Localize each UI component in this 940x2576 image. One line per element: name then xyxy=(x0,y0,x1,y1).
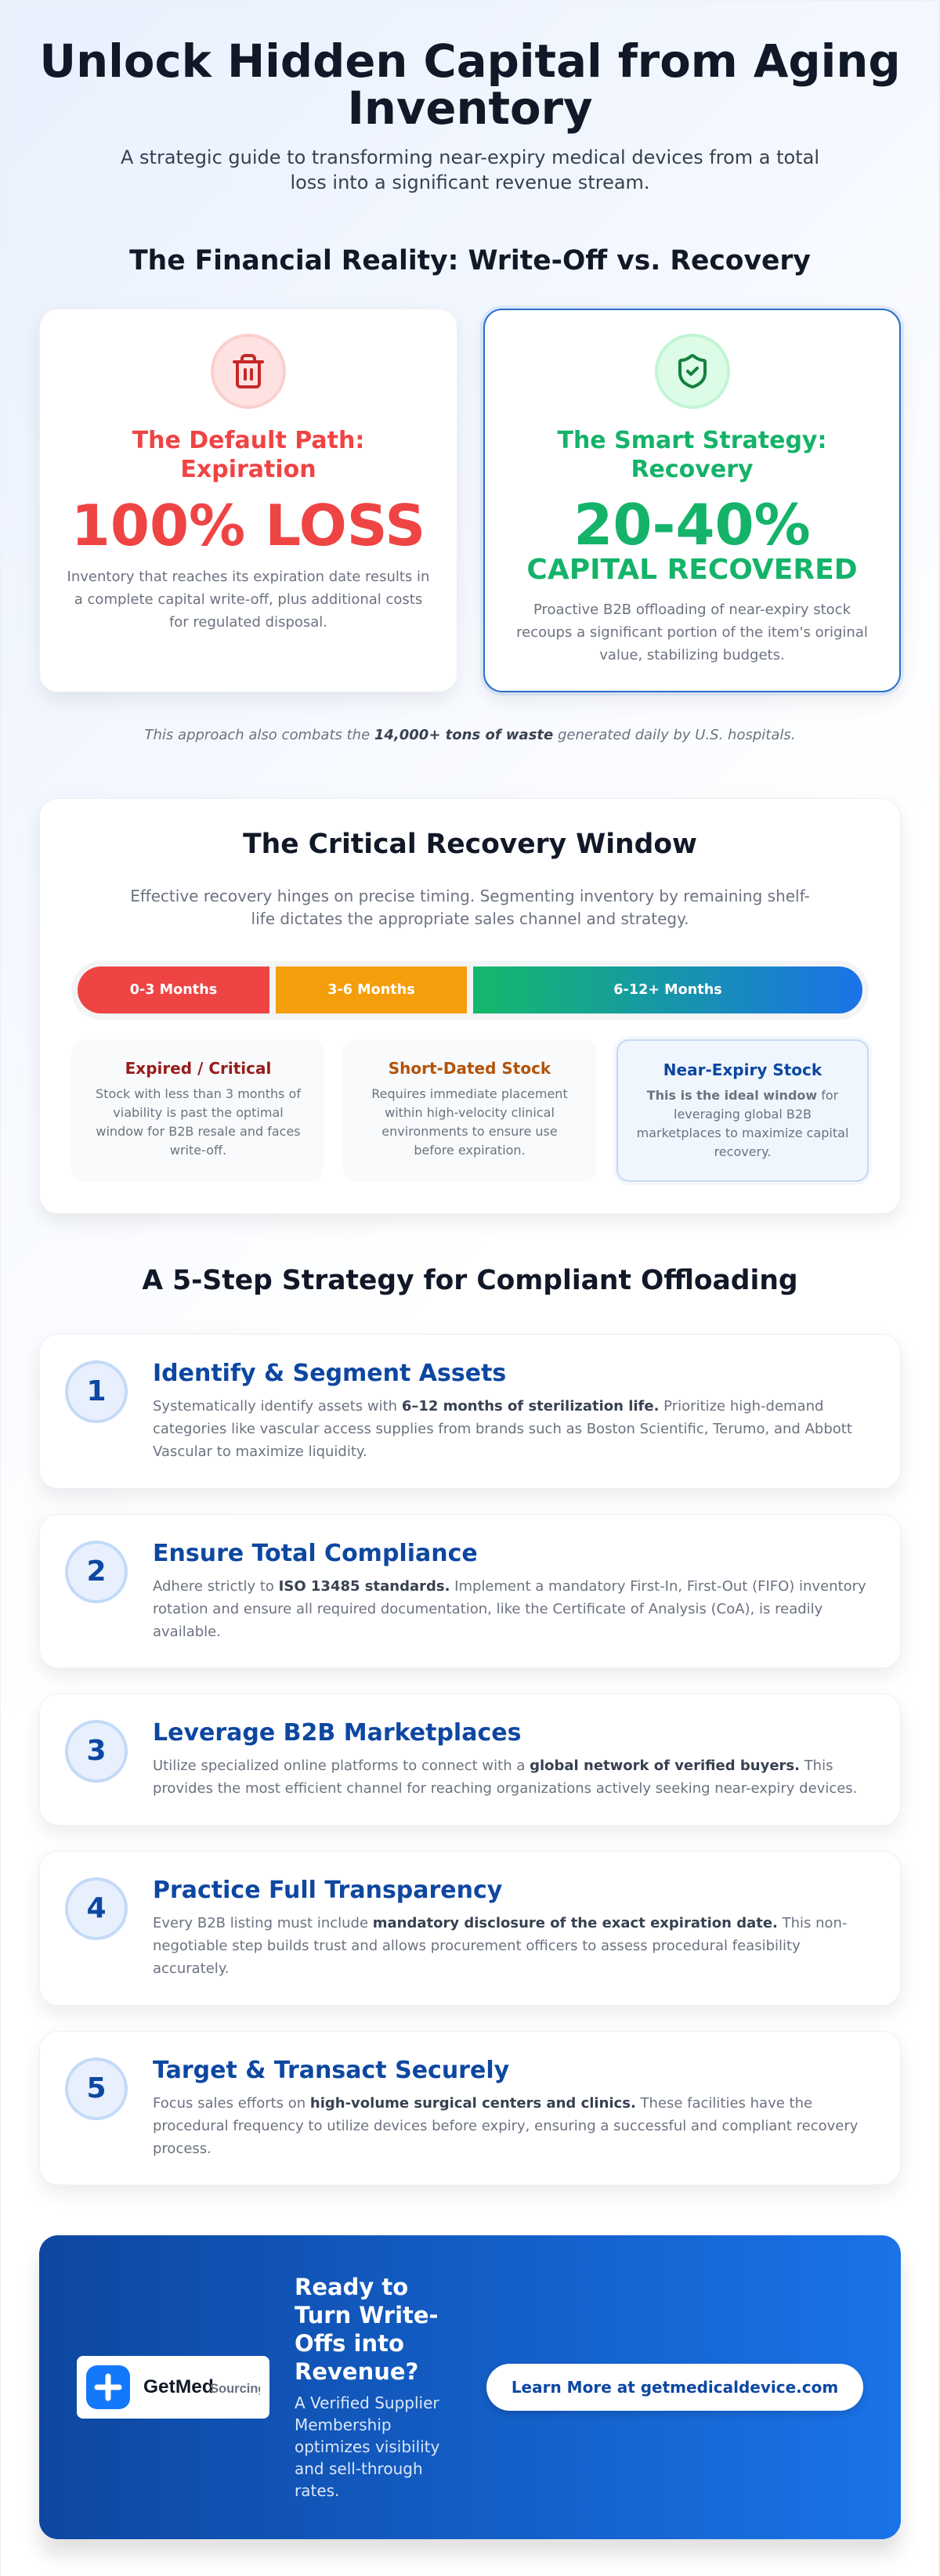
step 5 text: process. xyxy=(153,2141,212,2157)
number 3 xyxy=(65,1720,128,1783)
step 1 text xyxy=(153,1398,852,1460)
stat: 20-40%: 20-40% xyxy=(573,492,811,558)
heading: expired: Expired / Critical xyxy=(125,1059,271,1078)
logo: GetMedSourcing xyxy=(77,2356,269,2419)
step 4 text: accurately. xyxy=(153,1960,230,1977)
heading: default path: Expiration xyxy=(180,456,316,482)
step 2 xyxy=(39,1514,901,1668)
panel: smart strategy xyxy=(483,309,901,692)
number 1: 1 xyxy=(86,1375,107,1407)
card: short-dated stock xyxy=(343,1039,596,1182)
stat label: capital recovered: CAPITAL RECOVERED xyxy=(526,554,858,586)
step 5 heading: Target & Transact Securely xyxy=(153,2057,509,2084)
step 3 heading: Leverage B2B Marketplaces xyxy=(153,1719,521,1747)
text: near-expiry xyxy=(637,1088,848,1159)
cta button xyxy=(486,2364,863,2411)
text: expired xyxy=(96,1086,301,1158)
card: near-expiry stock xyxy=(616,1039,869,1182)
number 4 xyxy=(65,1877,128,1940)
heading: default path: The Default Path: xyxy=(132,427,364,454)
description: recovery window: Effective recovery hinges on precise timing. Segmenting inventory by remaining shelf- xyxy=(130,887,810,905)
step 2 text: rotation and ensure all required documentation, like the Certificate of Analysis (CoA), is readily xyxy=(153,1601,822,1617)
description: recovery window xyxy=(130,887,810,928)
cta button: Learn More at getmedicaldevice.com xyxy=(512,2378,838,2397)
segment: 6-12+ months xyxy=(473,966,862,1013)
cta heading: Revenue? xyxy=(295,2358,418,2385)
card: expired / critical xyxy=(71,1039,324,1182)
panel: default path xyxy=(39,309,457,692)
description: smart strategy: Proactive B2B offloading of near-expiry stock xyxy=(533,602,851,618)
heading: 5-step strategy: A 5-Step Strategy for Compliant Offloading xyxy=(142,1265,798,1296)
call to action panel xyxy=(39,2235,901,2539)
step 5 xyxy=(39,2031,901,2185)
text: near-expiry: This is the ideal window for xyxy=(647,1088,838,1103)
icon: shield check xyxy=(655,334,730,409)
number 4: 4 xyxy=(86,1892,107,1924)
cta text xyxy=(295,2394,439,2500)
subtitle: loss into a significant revenue stream. xyxy=(290,172,650,193)
description: default path: for regulated disposal. xyxy=(169,614,327,630)
step 3 text xyxy=(153,1758,857,1797)
number 3: 3 xyxy=(86,1735,107,1767)
number 2: 2 xyxy=(86,1555,107,1588)
segment: 0-3 months xyxy=(78,966,269,1013)
number 5: 5 xyxy=(86,2072,107,2105)
step 5 text: Focus sales efforts on high-volume surgical centers and clinics. These facilities have the xyxy=(153,2095,812,2112)
description: smart strategy: value, stabilizing budgets. xyxy=(599,647,785,663)
stat: 100% loss: 100% LOSS xyxy=(71,493,425,558)
cta text: optimizes visibility xyxy=(295,2437,439,2456)
title: Unlock Hidden Capital from Aging xyxy=(39,35,901,88)
step 1 text: Systematically identify assets with 6–12 months of sterilization life. Prioritize high-demand xyxy=(153,1398,823,1414)
description: default path: Inventory that reaches its expiration date results in xyxy=(67,569,429,585)
step 3 text: provides the most efficient channel for reaching organizations actively seeking near-expiry devices. xyxy=(153,1780,857,1797)
step 4 xyxy=(39,1851,901,2006)
segment: 0-3 months: 0-3 Months xyxy=(130,982,217,998)
description: default path: a complete capital write-off, plus additional costs xyxy=(74,591,422,608)
segment: 3-6 months: 3-6 Months xyxy=(327,982,415,998)
cta heading xyxy=(295,2274,439,2385)
cta text: and sell-through xyxy=(295,2459,423,2478)
subtitle xyxy=(121,146,819,193)
title xyxy=(39,35,901,135)
description: smart strategy xyxy=(516,602,868,663)
text: short-dated: Requires immediate placement xyxy=(371,1086,568,1101)
heading: smart strategy: Recovery xyxy=(631,456,754,482)
step 1 xyxy=(39,1334,901,1489)
step 2 text xyxy=(153,1578,866,1640)
description: recovery window: life dictates the appropriate sales channel and strategy. xyxy=(251,909,689,928)
text: expired: viability is past the optimal xyxy=(113,1105,284,1120)
cta heading: Turn Write- xyxy=(295,2302,439,2329)
step 3 text: Utilize specialized online platforms to connect with a global network of verified buyers. This xyxy=(153,1758,833,1774)
step 5 text: procedural frequency to utilize devices before expiry, ensuring a successful and compliant recovery xyxy=(153,2118,858,2134)
step 2 text: available. xyxy=(153,1624,221,1640)
heading: smart strategy xyxy=(557,427,827,482)
text: short-dated: within high-velocity clinical xyxy=(385,1105,555,1120)
number 5 xyxy=(65,2058,128,2120)
step 1 text: categories like vascular access supplies from brands such as Boston Scientific, Terumo, and Abbott xyxy=(153,1421,852,1437)
description: smart strategy: recoups a significant portion of the item's original xyxy=(516,624,868,641)
text: near-expiry: marketplaces to maximize capital xyxy=(637,1125,848,1140)
cta text: A Verified Supplier xyxy=(295,2394,439,2412)
heading: near-expiry: Near-Expiry Stock xyxy=(663,1060,822,1079)
text: near-expiry: leveraging global B2B xyxy=(674,1107,812,1122)
subtitle: A strategic guide to transforming near-expiry medical devices from a total xyxy=(121,146,819,168)
segment: 6-12+ months: 6-12+ Months xyxy=(613,982,722,998)
step 1 heading: Identify & Segment Assets xyxy=(153,1360,506,1387)
text: near-expiry: recovery. xyxy=(714,1144,771,1159)
step 1 text: Vascular to maximize liquidity. xyxy=(153,1443,367,1460)
step 5 text xyxy=(153,2095,858,2157)
note: waste: This approach also combats the 14,000+ tons of waste generated daily by U.S. hospitals. xyxy=(145,727,795,743)
heading: financial reality: The Financial Reality: Write-Off vs. Recovery xyxy=(129,245,811,276)
text: short-dated: environments to ensure use xyxy=(381,1124,558,1139)
text: short-dated: before expiration. xyxy=(414,1143,526,1158)
logo: GetMedSourcing: Sourcing xyxy=(210,2382,266,2396)
icon: trash xyxy=(211,334,286,409)
number 1 xyxy=(65,1360,128,1423)
step 4 heading: Practice Full Transparency xyxy=(153,1877,502,1904)
step 3 xyxy=(39,1693,901,1826)
heading: default path xyxy=(132,427,364,482)
heading: recovery window: The Critical Recovery Window xyxy=(243,829,697,860)
number 2 xyxy=(65,1541,128,1603)
step 2 heading: Ensure Total Compliance xyxy=(153,1540,478,1567)
cta text: Membership xyxy=(295,2415,392,2434)
step 4 text: negotiable step builds trust and allows procurement officers to assess procedural feasibility xyxy=(153,1938,801,1954)
logo: GetMedSourcing: GetMed xyxy=(143,2376,214,2397)
cta text: rates. xyxy=(295,2481,339,2500)
heading: short-dated: Short-Dated Stock xyxy=(389,1059,551,1078)
description: default path xyxy=(67,569,429,630)
heading: smart strategy: The Smart Strategy: xyxy=(557,427,827,454)
cta heading: Ready to xyxy=(295,2274,408,2300)
step 4 text: Every B2B listing must include mandatory disclosure of the exact expiration date. This non- xyxy=(153,1915,847,1931)
step 4 text xyxy=(153,1915,847,1977)
title: Inventory xyxy=(347,82,593,135)
text: expired: Stock with less than 3 months of xyxy=(96,1086,301,1101)
timeline bar xyxy=(71,961,869,1020)
panel: critical recovery window xyxy=(39,798,901,1214)
segment: 3-6 months xyxy=(276,966,467,1013)
text: expired: window for B2B resale and faces xyxy=(96,1124,301,1139)
step 2 text: Adhere strictly to ISO 13485 standards. Implement a mandatory First-In, First-Out (FIFO) inventory xyxy=(153,1578,866,1595)
text: expired: write-off. xyxy=(170,1143,226,1158)
text: short-dated xyxy=(371,1086,568,1158)
cta heading: Offs into xyxy=(295,2330,404,2357)
